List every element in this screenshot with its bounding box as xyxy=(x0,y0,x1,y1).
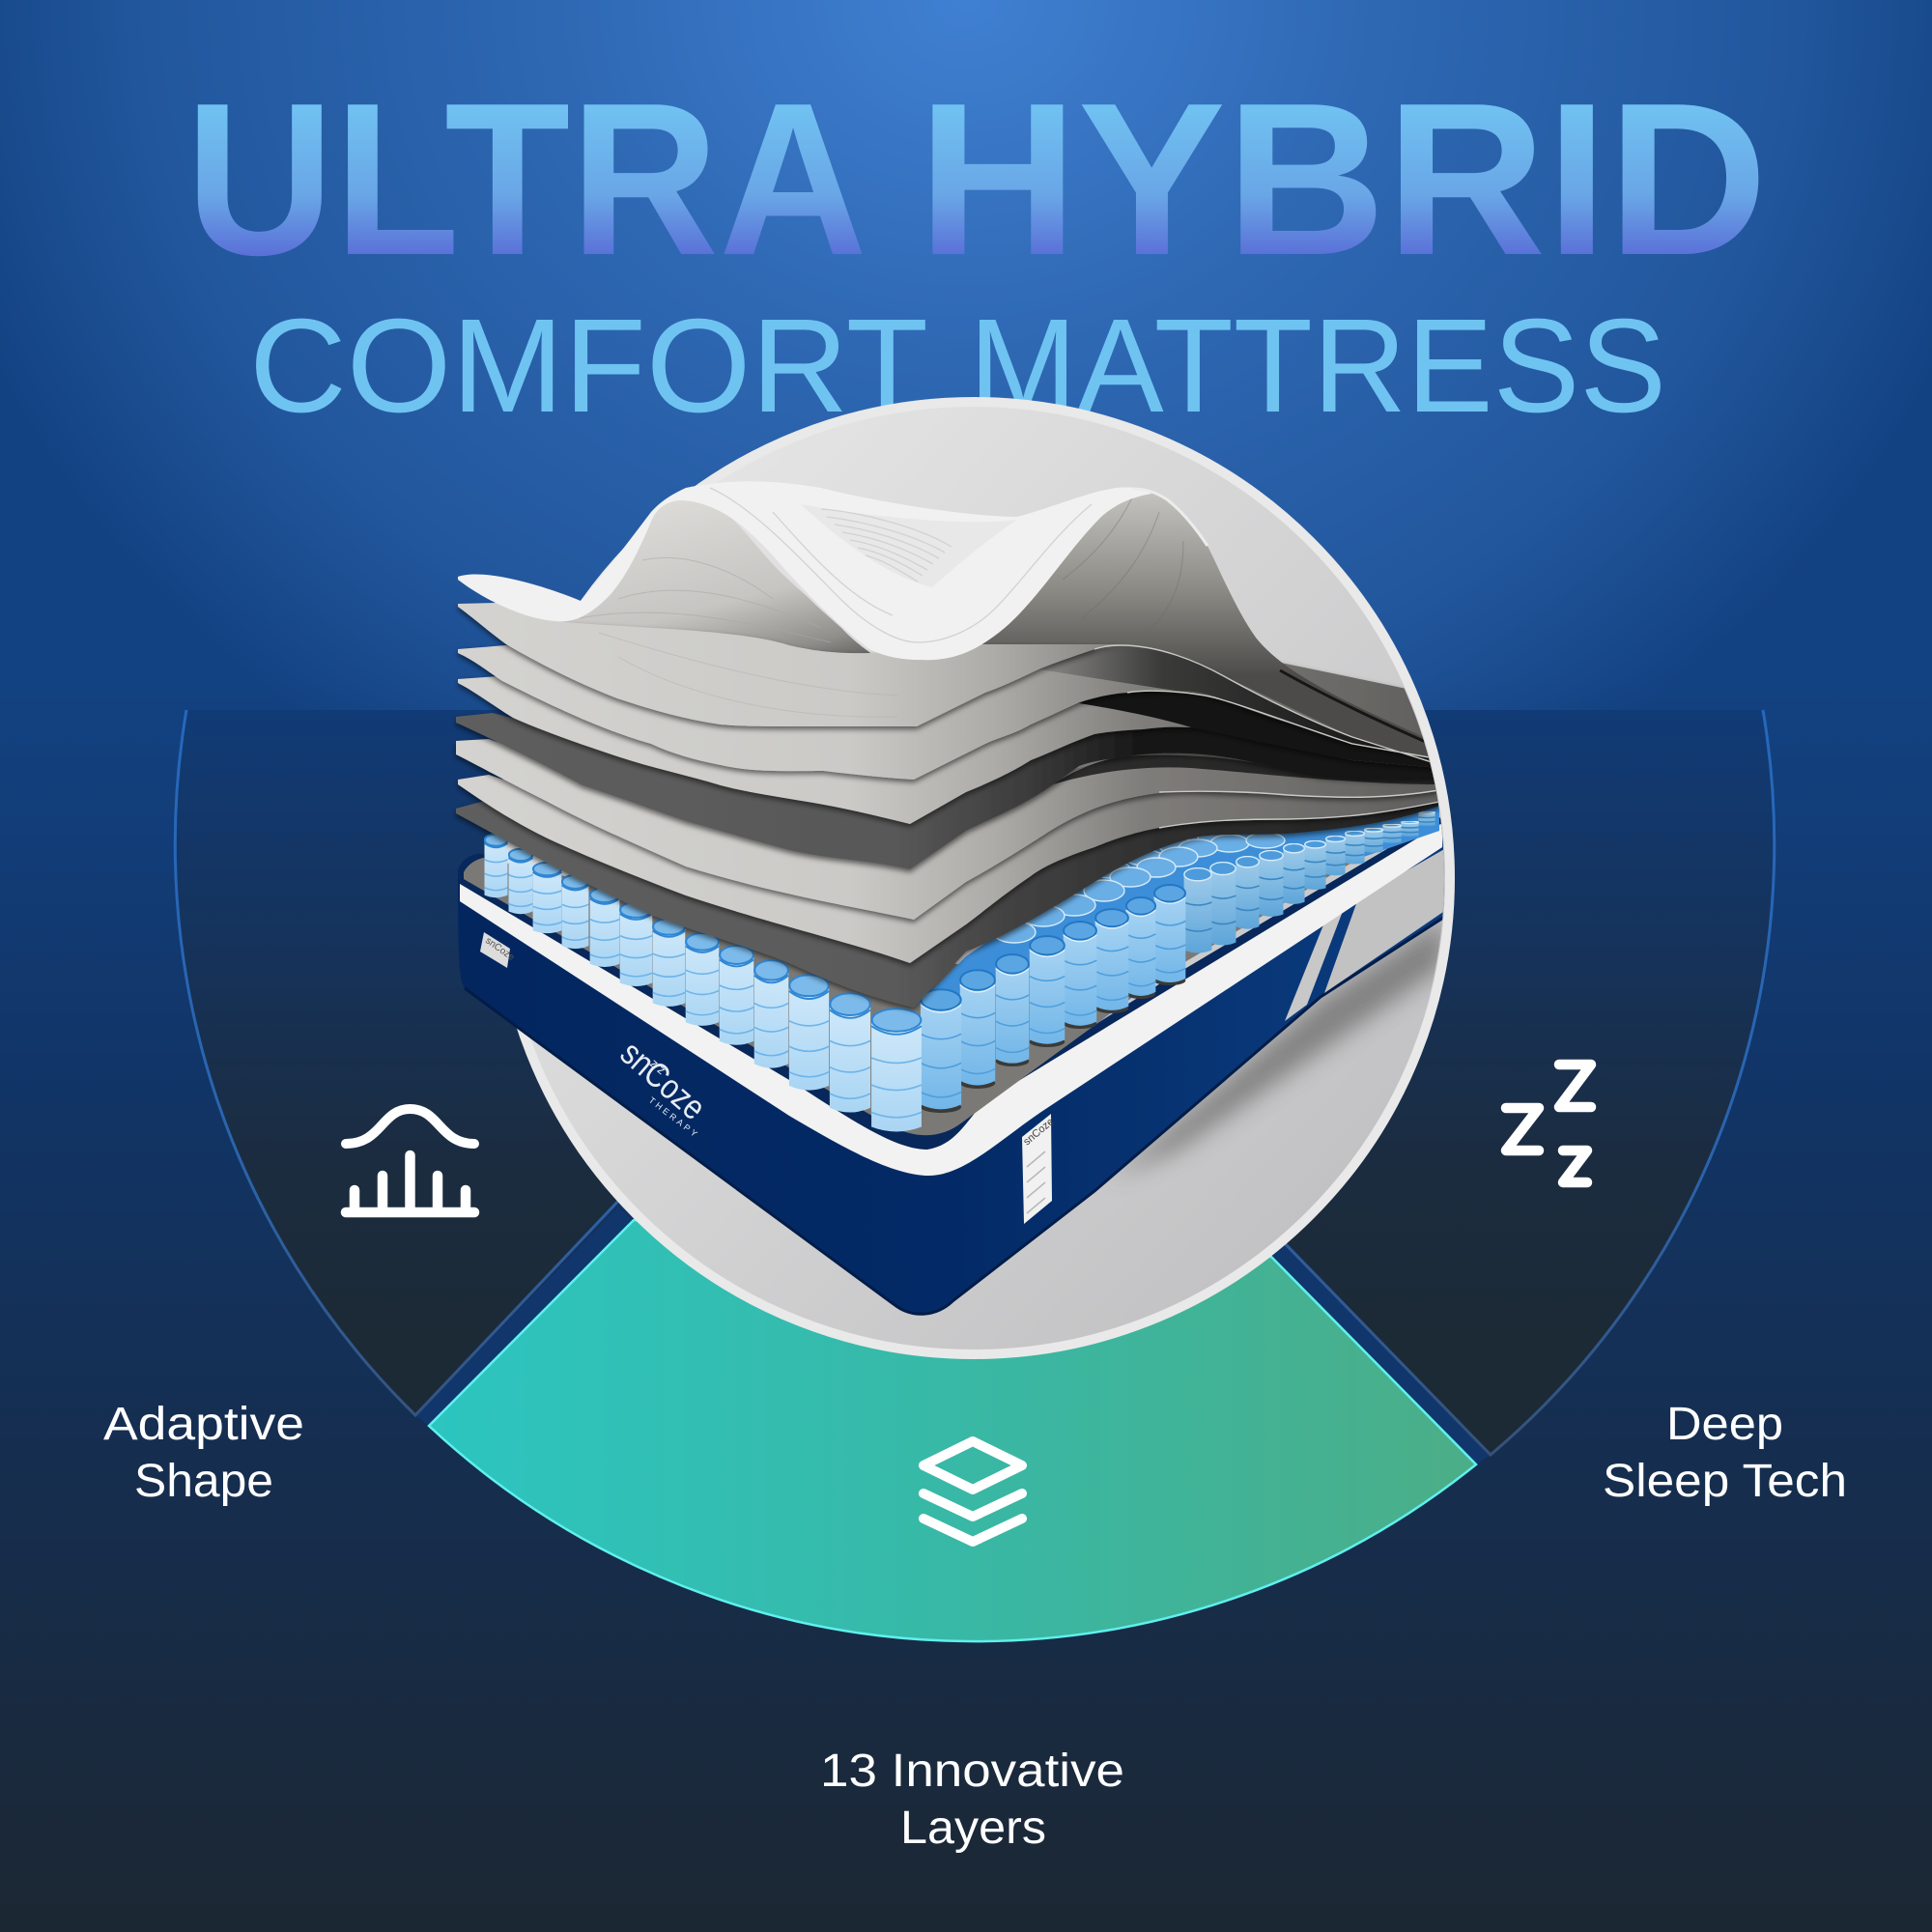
layer 2 underside shadow xyxy=(1040,645,1439,763)
panel: adaptive shape sector xyxy=(175,710,676,1426)
right care label: snCoze xyxy=(1021,1116,1056,1148)
layer 8: bottom foam xyxy=(456,773,1442,1008)
quilted centre panel xyxy=(801,504,1017,587)
left lobe underside xyxy=(554,500,872,667)
right care label xyxy=(1022,1114,1053,1224)
icon: stacked layers xyxy=(923,1441,1022,1542)
layer 4 xyxy=(458,676,1439,824)
layer edge highlights xyxy=(1094,645,1439,828)
piping xyxy=(458,816,1442,1153)
icon: sleeping z letters xyxy=(1506,1065,1591,1182)
label: Adaptive Shape: Shape xyxy=(134,1456,273,1507)
brand logo: z z xyxy=(647,1056,668,1077)
layer 2 seam lines xyxy=(599,633,898,717)
panel: deep sleep tech sector xyxy=(1208,710,1775,1464)
icon: bell curve with bars xyxy=(346,1109,474,1212)
title word: ULTRA: ULTRA xyxy=(185,57,867,300)
top grey surface xyxy=(464,858,1350,1136)
fan dark edge xyxy=(1280,670,1435,746)
brand logo: THERAPY xyxy=(647,1095,701,1141)
layer 5: dark foam xyxy=(456,713,1439,869)
side panel and stripe xyxy=(1324,848,1446,993)
label: Deep Sleep Tech: Deep xyxy=(1666,1399,1783,1450)
title word: HYBRID: HYBRID xyxy=(918,57,1768,300)
subtitle word: MATTRESS: MATTRESS xyxy=(969,292,1666,440)
right rim highlight xyxy=(1132,489,1208,546)
floor shadow xyxy=(1111,918,1444,1179)
small left tag: snCoze xyxy=(483,935,517,963)
label: Deep Sleep Tech xyxy=(1603,1399,1847,1507)
label: Adaptive Shape: Adaptive xyxy=(103,1399,304,1450)
panel: 13 layers sector xyxy=(429,1220,1476,1641)
front rows of pocket springs xyxy=(485,811,1435,1131)
top cover xyxy=(458,481,1151,660)
mattress base xyxy=(458,816,1446,1314)
back rows of pocket springs xyxy=(918,802,1439,1005)
label: 13 Innovative Layers: Layers xyxy=(900,1803,1046,1854)
label: 13 Innovative Layers xyxy=(820,1746,1124,1854)
stitch and quilt lines xyxy=(710,488,1092,642)
right lobe seam lines xyxy=(1063,497,1183,638)
mattress back edge xyxy=(1410,703,1421,732)
label: 13 Innovative Layers: 13 Innovative xyxy=(820,1746,1124,1797)
layer 3 xyxy=(458,638,1439,780)
layer 3 underside shadow xyxy=(1079,691,1439,768)
brand logo: snCoze xyxy=(613,1033,714,1127)
label: Adaptive Shape xyxy=(103,1399,304,1507)
layer 2 xyxy=(458,603,1125,726)
title xyxy=(185,57,1768,440)
small left tag xyxy=(480,932,517,968)
layer 6 xyxy=(456,739,1439,920)
right lobe underside xyxy=(950,489,1439,765)
layer 5 shadow strip xyxy=(1053,755,1439,784)
subtitle word: COMFORT: COMFORT xyxy=(249,292,928,440)
mattress illustration xyxy=(456,481,1446,1314)
left lobe quilting lines xyxy=(580,557,831,642)
white comfort band xyxy=(460,823,1442,1176)
layer 7 xyxy=(458,763,1439,963)
brand logo xyxy=(620,1045,701,1136)
label: Deep Sleep Tech: Sleep Tech xyxy=(1603,1456,1847,1507)
photo circle xyxy=(497,402,1450,1354)
